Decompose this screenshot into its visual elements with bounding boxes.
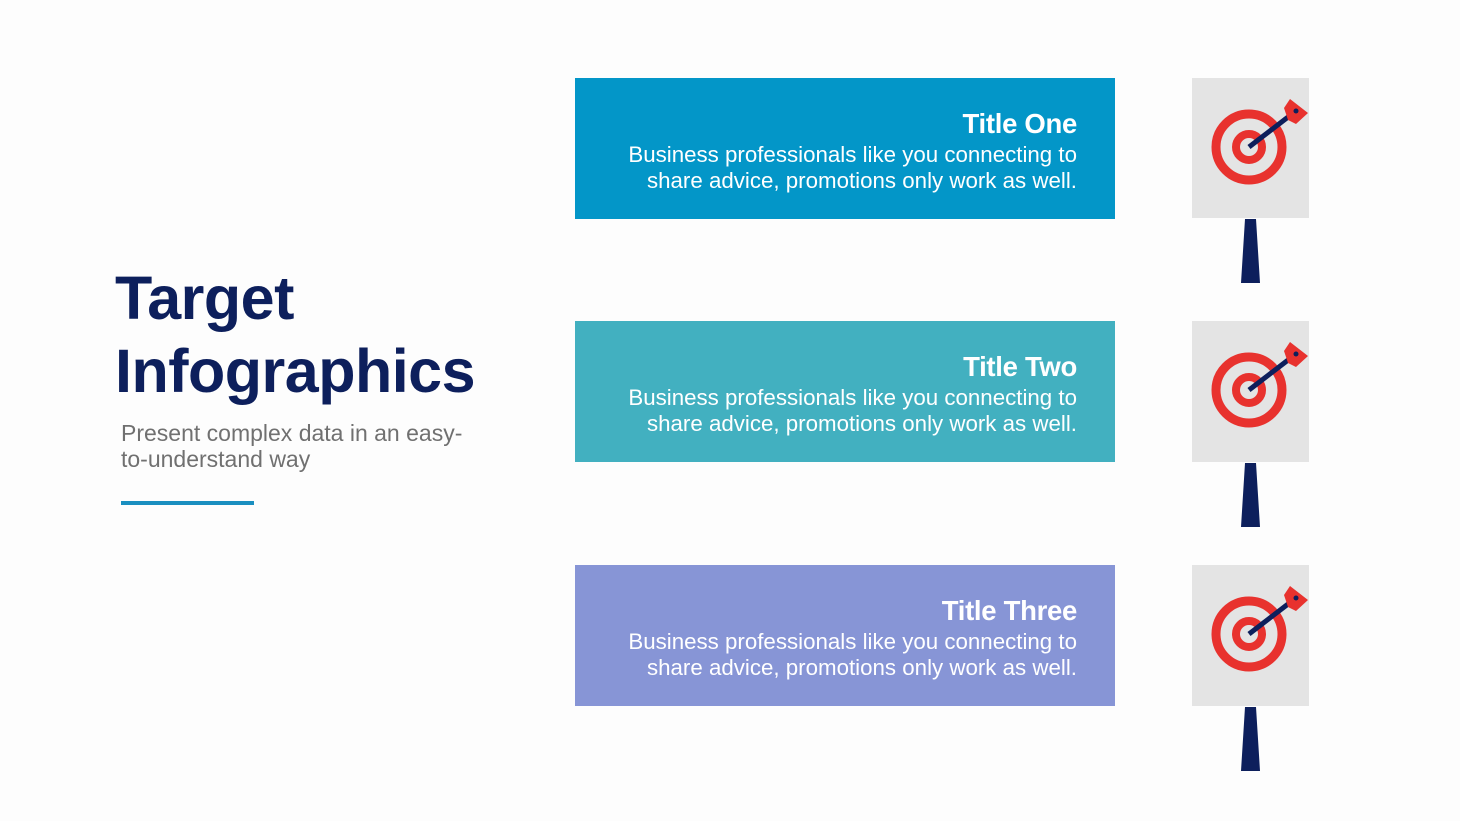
panel: title two: share advice, promotions only work as well. <box>647 411 1077 436</box>
title: Target <box>115 264 294 332</box>
panel: title one: Title One <box>963 108 1077 139</box>
icon: target sign one <box>1192 78 1309 283</box>
icon: target sign three <box>1192 565 1309 771</box>
panel: title three: share advice, promotions only work as well. <box>647 655 1077 680</box>
panel: title three: Title Three <box>942 595 1077 626</box>
title <box>115 264 475 405</box>
panel: title one: Business professionals like you connecting to <box>628 142 1077 167</box>
icon: target sign two <box>1192 321 1309 527</box>
panel: title three: Business professionals like you connecting to <box>628 629 1077 654</box>
subtitle: Present complex data in an easy- <box>121 420 462 446</box>
panel: title two: Title Two <box>963 351 1077 382</box>
accent line <box>121 501 254 505</box>
panel: title three <box>575 565 1115 706</box>
subtitle: to-understand way <box>121 446 310 472</box>
title: Infographics <box>115 337 475 405</box>
subtitle <box>121 420 462 472</box>
panel: title one: share advice, promotions only work as well. <box>647 168 1077 193</box>
panel: title two <box>575 321 1115 462</box>
panel: title two: Business professionals like you connecting to <box>628 385 1077 410</box>
panel: title one <box>575 78 1115 219</box>
